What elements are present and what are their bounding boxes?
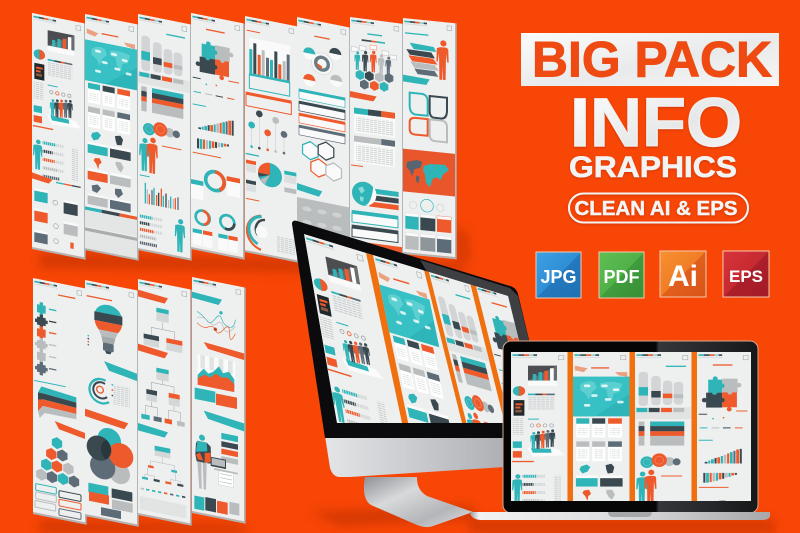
light bulb — [94, 302, 122, 357]
desktop monitor — [292, 220, 530, 528]
bezel glare — [420, 260, 530, 345]
pie chart — [258, 161, 282, 189]
staircase ribbons — [406, 42, 439, 77]
tiles — [405, 213, 451, 253]
orange heading — [87, 295, 112, 301]
small circles — [409, 198, 444, 214]
text rows — [299, 88, 345, 144]
desk and monitor — [211, 457, 238, 489]
tablet — [34, 63, 44, 81]
colour strip — [362, 39, 385, 44]
orange ribbon — [138, 290, 168, 304]
tab row 2 — [88, 106, 130, 135]
small icons row — [50, 90, 71, 98]
orange map band — [403, 149, 455, 197]
monitor screen — [304, 234, 519, 423]
people rows — [43, 141, 78, 185]
teal and orange boxes — [34, 105, 42, 123]
hub diagram — [303, 42, 342, 93]
monitor chin — [325, 436, 520, 477]
puzzle — [196, 39, 233, 82]
org chart 2 — [141, 365, 185, 427]
orange heading — [33, 125, 53, 130]
chart on monitor — [48, 30, 74, 56]
tab row 1 — [88, 83, 130, 111]
teal title — [405, 32, 428, 36]
area chart — [198, 354, 235, 392]
text rows — [193, 73, 239, 114]
teal callout box — [191, 179, 203, 200]
panel: bottom sheet 2, light bulb and venn — [85, 280, 139, 527]
panel: bottom sheet 1, puzzle stack and hexagons — [33, 278, 87, 525]
legend tabs — [88, 483, 133, 522]
teal ribbon — [138, 423, 168, 438]
globe — [352, 180, 399, 210]
panel: top sheet 5, columns, pins and pie — [245, 16, 299, 263]
hexagons — [303, 137, 341, 183]
teal ribbon — [204, 411, 244, 431]
icon: EPS — [723, 251, 769, 297]
laptop — [470, 341, 770, 524]
teal heading — [246, 153, 259, 157]
monitor bezel — [292, 221, 530, 438]
teal ribbon — [403, 75, 430, 85]
table 2 — [354, 136, 395, 167]
grey band — [297, 197, 349, 261]
bottom tiles — [194, 495, 239, 518]
orange title — [206, 29, 225, 34]
panel: top sheet 3, cylinders and bar chart — [138, 14, 192, 261]
teal ribbon — [104, 361, 137, 381]
map icons and tabs, upper rows — [88, 129, 131, 188]
orange divider strips — [366, 253, 510, 423]
org chart 1 — [144, 305, 182, 353]
cylinder bars — [141, 35, 182, 78]
pin timeline — [248, 108, 287, 155]
small donuts — [196, 209, 234, 231]
teal outline box — [249, 73, 290, 96]
orange figure — [436, 40, 449, 80]
pill: CLEAN AI & EPS — [569, 194, 748, 222]
orange heading — [193, 152, 221, 158]
orange ribbon — [85, 409, 128, 430]
two boxes — [195, 388, 237, 409]
puzzle stack — [35, 301, 48, 377]
side tabs — [246, 160, 296, 201]
orange ribbon — [350, 91, 377, 102]
orange footer — [350, 240, 402, 258]
panel: top sheet 4, puzzle and rings — [191, 13, 245, 260]
hexagon pyramid — [36, 433, 79, 489]
pie chart — [34, 48, 45, 61]
legend dots — [87, 335, 89, 346]
legend tags — [221, 433, 238, 465]
panel: top sheet 2, world map and tabs — [85, 14, 139, 261]
floor shadows — [40, 225, 775, 533]
orange ribbon — [138, 344, 168, 359]
icon: PDF — [599, 252, 644, 298]
bar chart falling — [197, 138, 229, 155]
panel: bottom sheet 4, line and area charts — [192, 277, 246, 524]
small tabs — [193, 228, 238, 253]
folder tiles — [34, 188, 78, 250]
org chart 3 — [141, 443, 185, 498]
teal title — [367, 33, 382, 36]
icon: EPS: EPS — [729, 267, 763, 286]
nested arcs — [247, 213, 268, 251]
orange heading — [162, 145, 181, 150]
ring labels — [111, 384, 130, 408]
ribbon band — [85, 206, 137, 258]
folded stair — [38, 386, 76, 425]
teal ribbon — [192, 292, 222, 306]
panel: top sheet 8, stairs, leaves and tiles — [403, 18, 457, 259]
laptop notch — [608, 512, 652, 517]
title box: BIG PACK: BIG PACK — [532, 32, 772, 88]
icon: Ai: Ai — [668, 260, 698, 293]
laptop screen — [511, 352, 751, 501]
teal figure — [175, 218, 185, 253]
teal heading — [140, 174, 150, 177]
teal map band — [85, 39, 137, 90]
map icons and tabs, lower row — [88, 183, 131, 212]
panel: top sheet 6, hub and hexagons — [297, 17, 351, 262]
laptop base — [470, 512, 770, 520]
outlined pills — [35, 483, 81, 520]
bar chart rising — [198, 114, 234, 136]
title: INFO: INFO — [570, 84, 742, 161]
teal ribbon — [297, 183, 322, 197]
panel: top sheet 1, devices and people — [32, 13, 86, 260]
monitor stand — [364, 477, 473, 527]
outlined boxes — [352, 210, 398, 243]
colour strip and text — [34, 56, 72, 106]
title: GRAPHICS: GRAPHICS — [569, 151, 737, 184]
orange outline box — [246, 91, 292, 115]
icon: JPG — [536, 252, 581, 298]
orange callout box — [227, 176, 240, 198]
figures with speech bubbles — [351, 43, 397, 77]
orange heading — [351, 164, 363, 167]
table 1 — [354, 108, 395, 138]
person figure — [33, 139, 42, 170]
legend tabs — [138, 71, 190, 93]
icon: Ai — [660, 251, 706, 297]
four leaf shapes — [410, 93, 447, 142]
icon: PDF: PDF — [604, 267, 640, 287]
ring chart — [90, 377, 109, 405]
hexagon cluster — [356, 69, 393, 93]
column chart — [249, 38, 290, 81]
bar chart — [145, 183, 179, 210]
colour strip — [56, 182, 81, 188]
business person — [195, 433, 211, 491]
text lines — [277, 236, 295, 256]
teal title — [166, 34, 185, 39]
venn diagram — [87, 424, 133, 487]
orange ribbon — [55, 421, 85, 439]
orange ribbon — [32, 172, 53, 184]
teal heading — [34, 380, 66, 387]
two figures — [139, 135, 158, 175]
panel: top sheet 7, figures, tables and globe — [350, 17, 404, 260]
note box — [140, 496, 186, 519]
pill: CLEAN AI & EPS: CLEAN AI & EPS — [574, 198, 738, 220]
step labels — [49, 309, 56, 371]
progress rows — [140, 214, 162, 249]
orange title — [314, 35, 330, 40]
laptop lid — [503, 341, 758, 513]
orange title — [247, 30, 260, 33]
silhouettes on platform — [47, 95, 81, 130]
circles — [143, 119, 180, 141]
table — [141, 86, 183, 119]
icon: JPG: JPG — [540, 267, 577, 287]
orange ribbon — [204, 342, 244, 360]
banners — [87, 28, 135, 49]
line chart — [197, 306, 235, 340]
orange heading — [246, 198, 259, 202]
panel: bottom sheet 3, org charts — [138, 279, 192, 526]
donut — [206, 170, 224, 192]
orange title — [58, 294, 75, 299]
